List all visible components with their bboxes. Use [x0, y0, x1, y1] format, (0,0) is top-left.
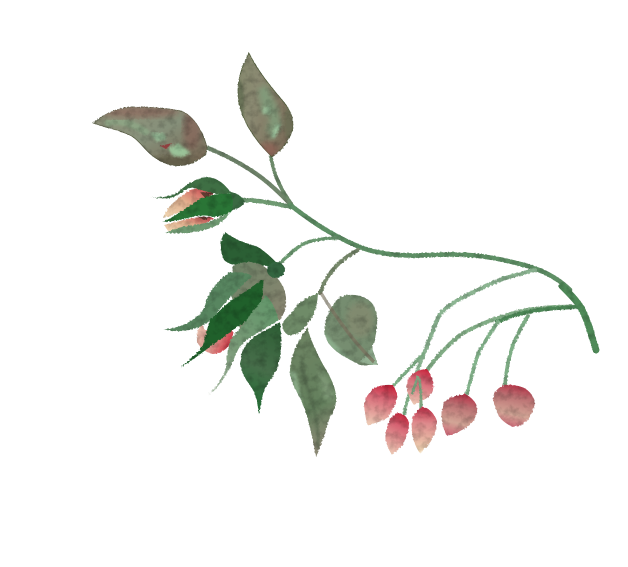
berries: cluster — [364, 369, 535, 455]
branch: main stem — [290, 205, 570, 290]
bud: lower petal — [164, 217, 214, 231]
berry 6 — [493, 385, 535, 427]
berry 1 — [364, 385, 397, 425]
rose: dark centre sepal — [180, 279, 263, 368]
bud: dark petal shadows — [196, 192, 213, 220]
bud: calyx — [230, 192, 245, 210]
branch: berry stems cluster — [394, 354, 423, 414]
rose: dark lower leaf — [240, 322, 281, 415]
berry 3 — [385, 413, 409, 455]
berry 2 — [407, 369, 433, 405]
rose: dark top leaf — [221, 232, 276, 266]
branch: stem to closed bud — [243, 200, 291, 207]
leaf: long pointed leaf — [288, 327, 336, 457]
branch: darker green end of lower stem — [497, 307, 582, 322]
leaf: left brown leaf — [93, 106, 207, 168]
berry stems over berry 2 — [412, 376, 421, 405]
branch: upper-left stem to brown leaf — [208, 148, 292, 206]
branch: fifth berry stem — [467, 322, 498, 393]
rose: large rose bud — [163, 232, 286, 415]
branch: stem to upright leaf — [271, 157, 292, 205]
leaf: midrib — [321, 293, 374, 362]
illustration: watercolor rose branch — [92, 52, 600, 456]
leaf: small leaf — [282, 293, 318, 335]
rose: brown bulb — [230, 262, 286, 330]
rose: pink bud visible — [197, 323, 233, 354]
berry 4 — [412, 407, 437, 453]
main stem — [208, 148, 596, 414]
leaf: upright brown leaf — [236, 53, 294, 158]
branch: lower berry stem — [428, 307, 582, 369]
branch: stem to large rose — [280, 238, 338, 263]
bud: closed rosebud — [150, 177, 245, 233]
rose: calyx — [267, 262, 285, 278]
branch: stem to lower leaves — [320, 250, 358, 293]
bud: green body — [162, 193, 235, 222]
bud: top sepal — [150, 177, 231, 198]
rose: left sepal — [163, 272, 252, 331]
branch: thick stem end — [562, 286, 596, 350]
branch: sixth berry stem — [505, 316, 528, 385]
rose: light sepal — [208, 295, 279, 395]
berry 5 — [441, 394, 477, 436]
leaf: midrib — [301, 360, 318, 448]
bud: bottom sepal — [165, 212, 230, 233]
branch: upper berry stem — [413, 270, 535, 385]
bud: upper petal — [163, 189, 214, 218]
leaf: right rounded leaf — [321, 293, 380, 367]
